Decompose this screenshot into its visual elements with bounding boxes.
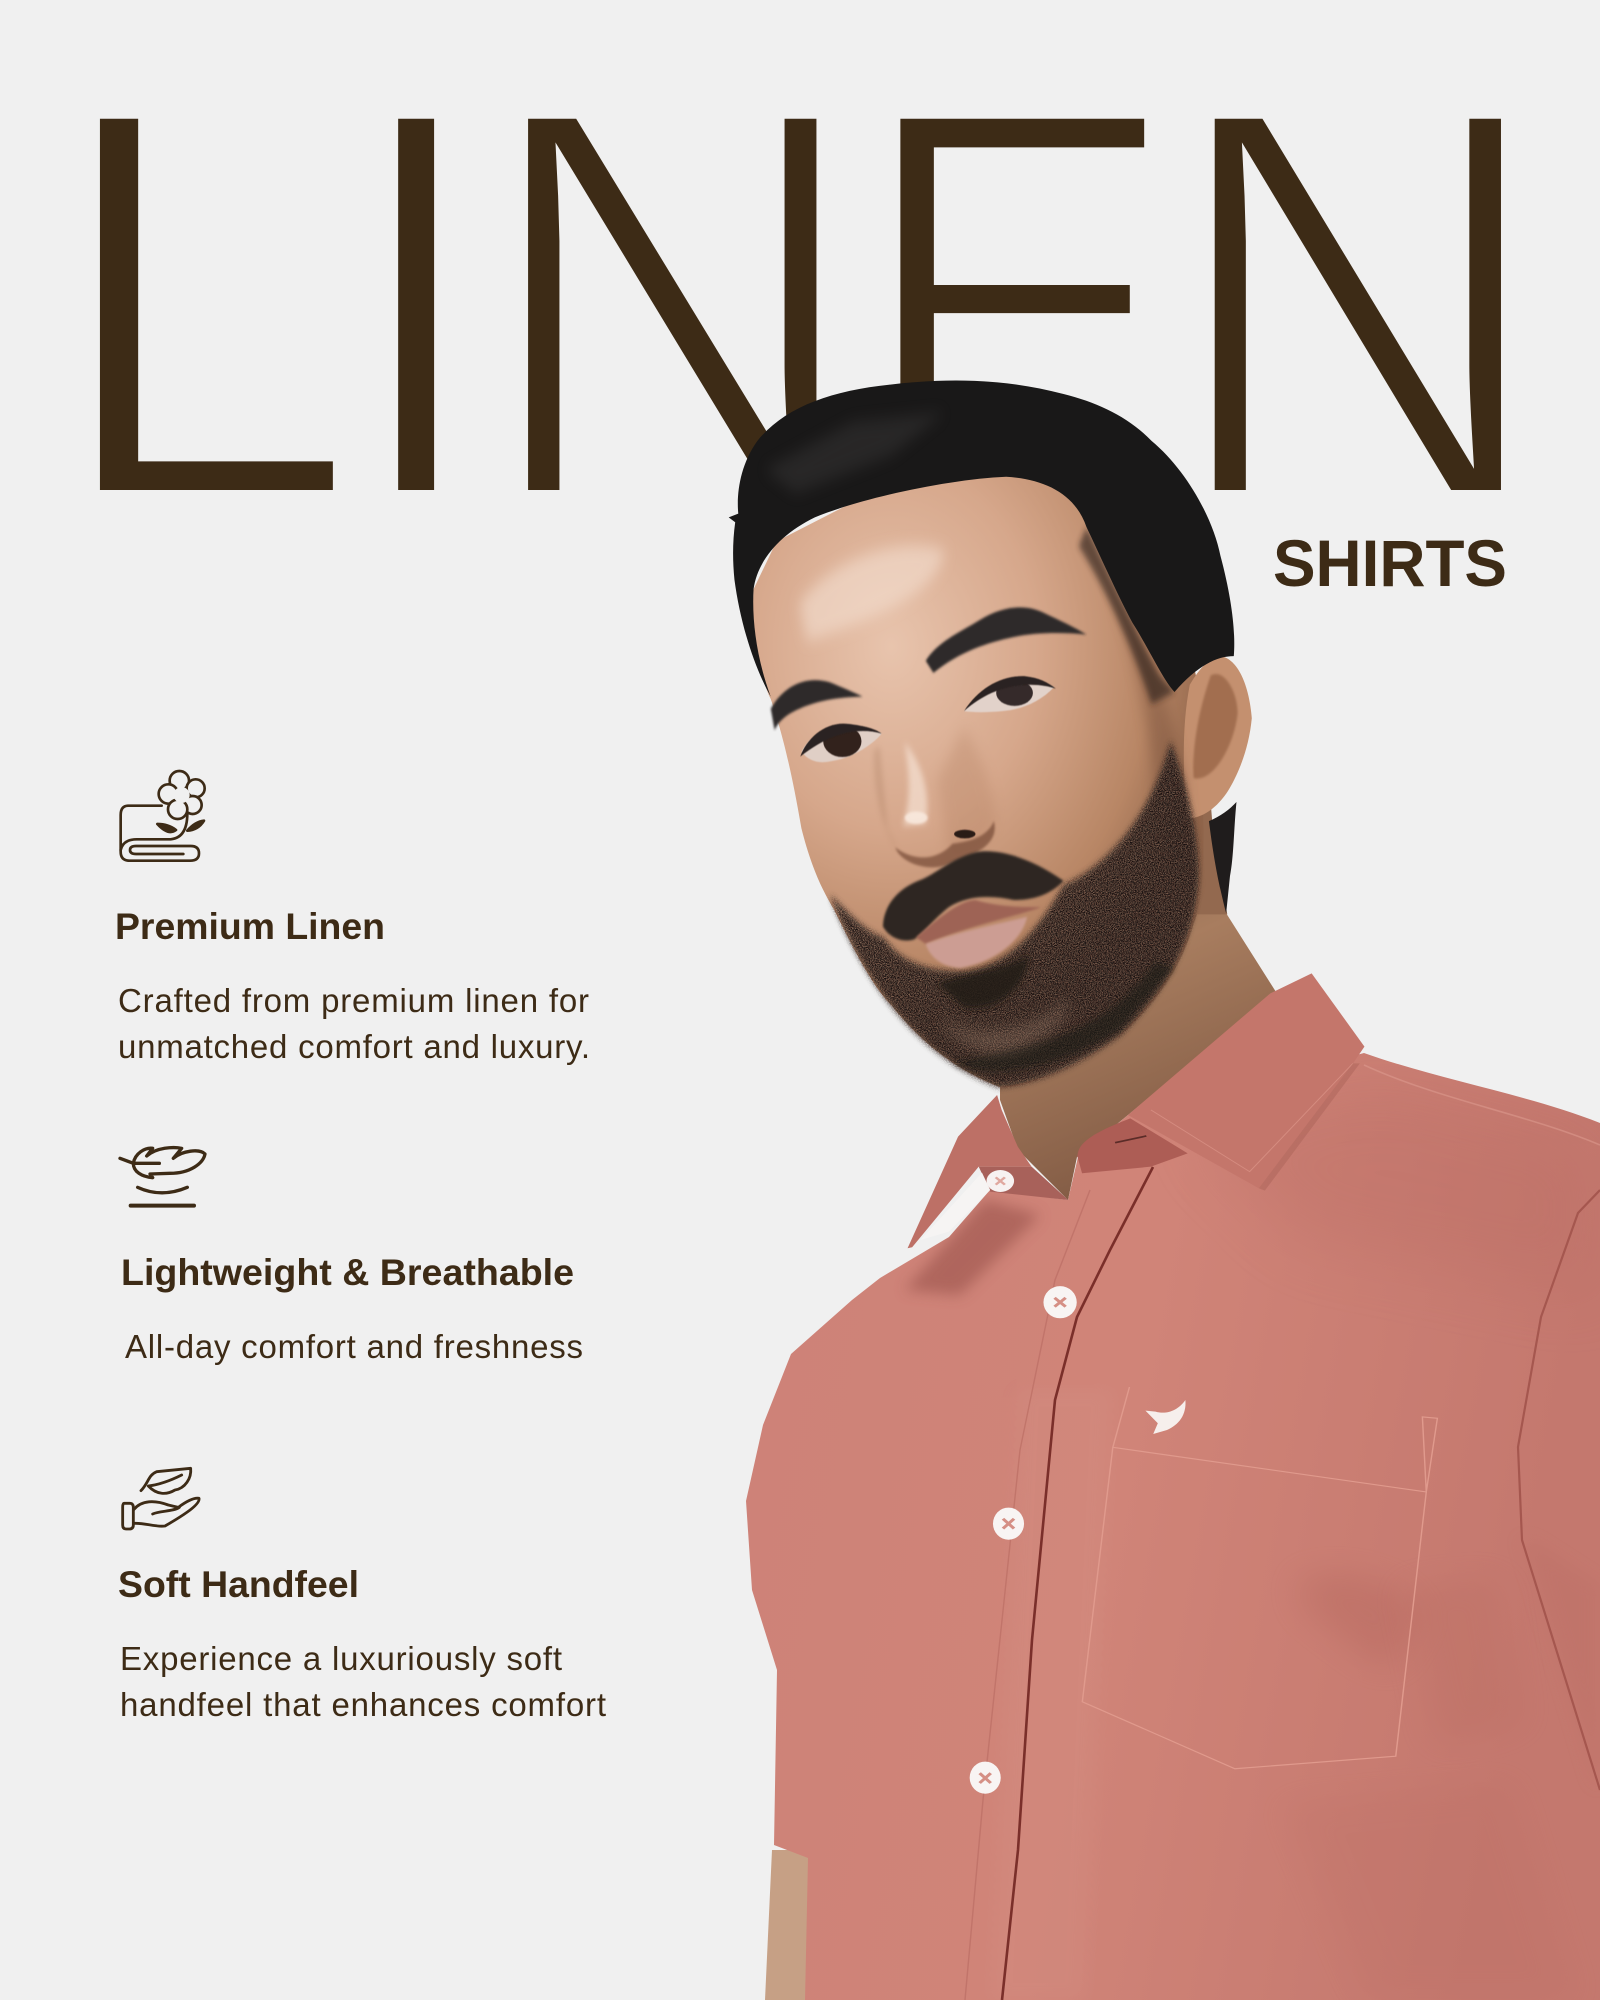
arm (765, 1850, 812, 2000)
eye right (964, 676, 1056, 712)
forehead highlight (799, 546, 945, 642)
feature: Soft Handfeel (118, 1468, 606, 1723)
eyebrows (771, 607, 1086, 730)
beard (830, 742, 1198, 1087)
title: LINEN: I (343, 0, 489, 617)
icon: hand holding leaf (123, 1468, 199, 1529)
face side shadow (1106, 575, 1194, 895)
neck behind ear (1159, 733, 1227, 914)
hair sheen (765, 412, 945, 493)
collar gap (920, 1173, 990, 1240)
description: unmatched comfort and luxury. (118, 1028, 590, 1065)
title: LINEN: N (477, 0, 867, 616)
temple shadow (1079, 527, 1174, 704)
heading: Soft Handfeel (118, 1564, 359, 1605)
collar (908, 973, 1364, 1248)
model photo illustration (729, 380, 1600, 2000)
neck (1000, 800, 1276, 1200)
placket and sleeve seams (965, 1065, 1600, 2000)
description: Crafted from premium linen for (118, 982, 589, 1019)
collar right (1128, 973, 1364, 1188)
head (729, 380, 1252, 1087)
title: LINEN: L (47, 0, 358, 616)
feature: Lightweight & Breathable (120, 1148, 583, 1365)
moustache (883, 851, 1064, 941)
heading: Premium Linen (115, 906, 385, 947)
logo (1145, 1400, 1186, 1434)
face (753, 470, 1204, 1087)
hair (729, 380, 1234, 697)
description: All-day comfort and freshness (125, 1328, 583, 1365)
collar button (987, 1170, 1014, 1192)
collar band (1077, 1118, 1188, 1173)
feature: Premium Linen (115, 771, 590, 1065)
subtitle: SHIRTS: SHIRTS (1273, 526, 1507, 600)
shirt shading (905, 1085, 1600, 2000)
icon: feather above lines (120, 1148, 205, 1206)
title: LINEN: E (854, 0, 1181, 616)
icon: folded fabric with flower (121, 771, 205, 861)
collar shadow (979, 1167, 1068, 1200)
title: LINEN (47, 0, 1551, 617)
eye left (800, 724, 882, 762)
lips (916, 900, 1041, 968)
collar left (908, 1095, 1032, 1248)
description: Experience a luxuriously soft (120, 1640, 562, 1677)
heading: Lightweight & Breathable (121, 1252, 574, 1293)
description: handfeel that enhances comfort (120, 1686, 606, 1723)
shirt body (746, 1053, 1600, 2000)
title: LINEN: N (1164, 0, 1551, 616)
ear (1184, 656, 1252, 819)
nose (874, 728, 995, 867)
description (118, 982, 590, 1065)
description (120, 1640, 606, 1723)
pocket (1082, 1387, 1437, 1769)
buttons (970, 1286, 1077, 1794)
back hair (1209, 802, 1236, 913)
